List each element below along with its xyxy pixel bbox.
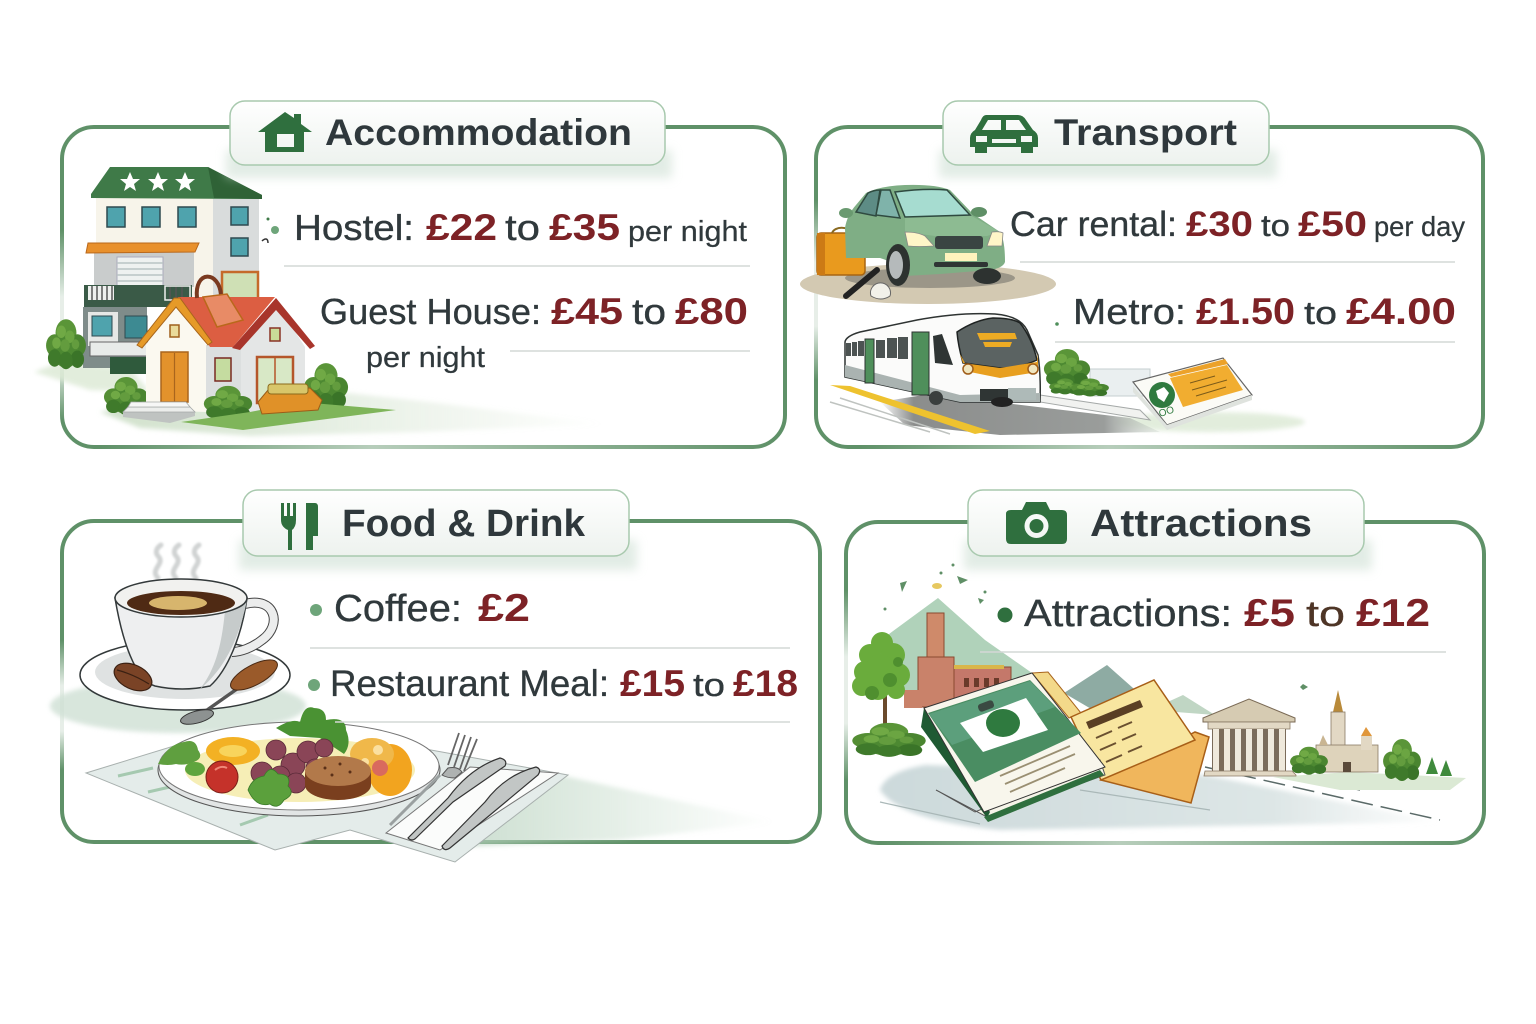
price list: attractions: to xyxy=(1306,593,1345,634)
price list: accommodation: per night xyxy=(366,342,485,374)
illustration: metro train and ticket: OO xyxy=(1158,405,1176,420)
heading pill: attractions xyxy=(964,490,1372,570)
price list: attractions: £5 xyxy=(1244,592,1295,635)
price list: food and drink: Coffee: xyxy=(334,588,462,630)
panel: accommodation xyxy=(34,101,785,452)
price list: food and drink xyxy=(308,587,798,722)
illustration: metro train and ticket xyxy=(830,314,1305,435)
icon: house xyxy=(258,112,312,152)
panel: food and drink xyxy=(50,490,820,862)
price list: food and drink: Restaurant Meal: xyxy=(330,663,609,704)
price list: accommodation xyxy=(262,207,750,374)
price list: accommodation: to xyxy=(505,207,540,248)
icon: camera xyxy=(1006,502,1067,544)
price list: food and drink: £15 xyxy=(620,663,685,704)
illustration: coffee cup xyxy=(50,545,306,733)
price list: attractions: Attractions: xyxy=(1024,593,1232,635)
heading pill: accommodation xyxy=(226,101,672,178)
price list: accommodation: Hostel: xyxy=(294,207,414,248)
price list: food and drink: to xyxy=(693,667,725,703)
price list: attractions xyxy=(980,592,1446,652)
price list: transport: £30 xyxy=(1186,205,1253,244)
price list: accommodation: to xyxy=(632,291,666,332)
price list: accommodation: per night xyxy=(628,216,747,248)
heading: Accommodation: Accommodation xyxy=(325,112,632,153)
icon: car xyxy=(970,115,1038,153)
price list: transport: to xyxy=(1261,208,1290,243)
illustration: plate of food and cutlery xyxy=(86,707,775,862)
icon: fork and knife xyxy=(281,503,318,550)
panel: attractions xyxy=(840,490,1484,848)
price list: accommodation: £45 xyxy=(551,291,623,332)
heading: Food & Drink: Food & Drink xyxy=(342,503,586,545)
illustration: hotel and guest house xyxy=(34,167,606,436)
heading: Attractions: Attractions xyxy=(1090,503,1312,545)
price list: transport xyxy=(1010,205,1465,342)
illustration: landmarks, guidebook and tickets xyxy=(852,564,1466,830)
price list: food and drink: £18 xyxy=(733,663,798,704)
price list: transport: £1.50 xyxy=(1196,291,1295,332)
price list: transport: to xyxy=(1304,295,1337,331)
price list: transport: £50 xyxy=(1298,205,1367,244)
price list: transport: £4.00 xyxy=(1346,291,1456,332)
price list: transport: Car rental: xyxy=(1010,205,1177,244)
price list: transport: Metro: xyxy=(1073,291,1186,332)
price list: accommodation: Guest House: xyxy=(320,291,541,332)
price list: accommodation: £22 xyxy=(426,207,497,248)
heading pill: transport xyxy=(939,101,1277,178)
panel: transport xyxy=(800,101,1483,452)
price list: accommodation: £35 xyxy=(549,207,620,248)
price list: accommodation: £80 xyxy=(675,291,748,332)
heading pill: food and drink xyxy=(239,490,637,570)
heading: Transport: Transport xyxy=(1054,112,1237,153)
price list: transport: per day xyxy=(1374,211,1465,242)
price list: food and drink: £2 xyxy=(478,587,530,630)
price list: attractions: £12 xyxy=(1356,592,1430,635)
illustration: rental car xyxy=(800,185,1056,304)
